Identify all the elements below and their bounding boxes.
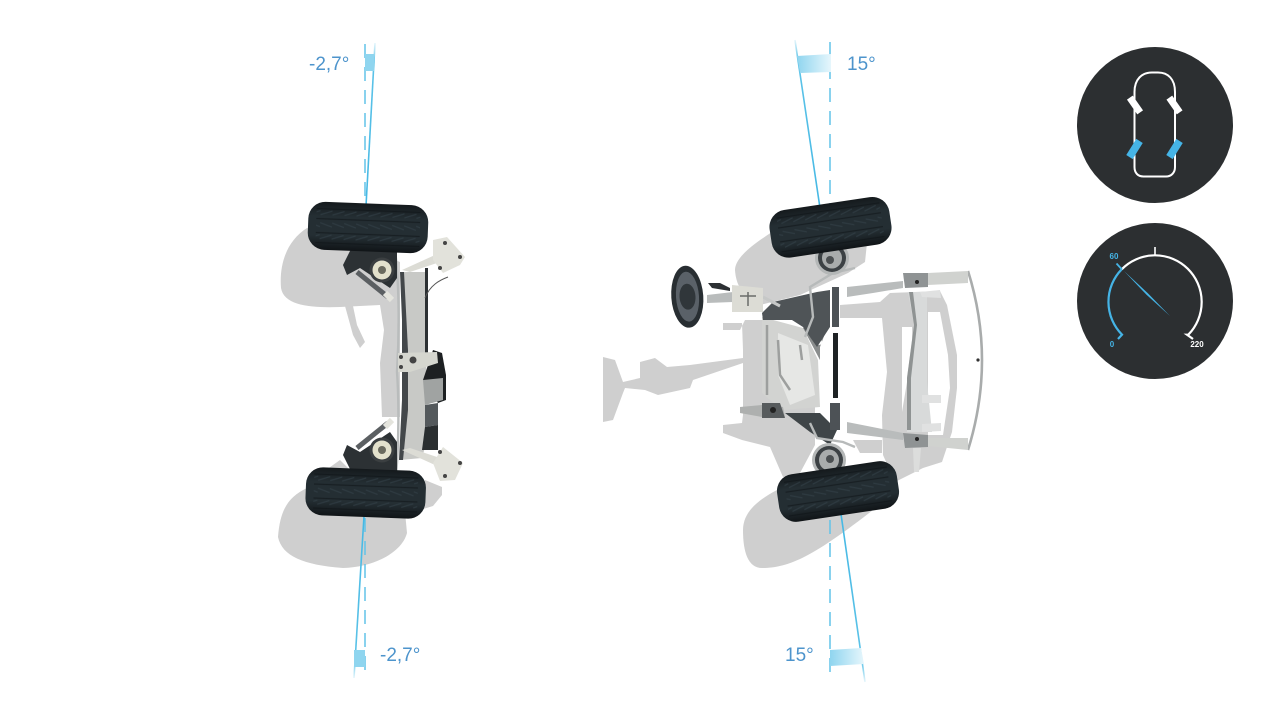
white front right wheel <box>1166 96 1183 114</box>
steering rod <box>425 268 428 353</box>
right assembly shadows <box>603 232 957 568</box>
engine cradle <box>762 317 820 410</box>
steering wheel <box>669 265 705 329</box>
bottom rail pin <box>913 448 921 472</box>
left top angle wedge <box>365 54 374 71</box>
top hub <box>815 241 849 275</box>
steering link to rack <box>763 297 780 306</box>
top control arm <box>343 247 397 288</box>
cradle hole <box>816 339 822 345</box>
top knuckle <box>433 237 465 273</box>
top right tyre <box>767 195 894 260</box>
top tick <box>1154 247 1156 255</box>
bottom side rail <box>847 422 903 440</box>
white front left wheel <box>1127 96 1143 114</box>
crossmember <box>400 272 427 460</box>
car outline <box>1134 72 1175 176</box>
left slanted wheel axes <box>354 43 375 678</box>
cradle rear dark part <box>803 320 830 360</box>
left assembly shadows <box>278 228 442 568</box>
right top angle wedge <box>797 54 831 73</box>
left dashed axis lines <box>364 44 366 678</box>
top left tyre <box>307 201 429 254</box>
left axle: rear chassis <box>305 201 465 519</box>
label: 0: 0 <box>1110 340 1115 349</box>
bottom right tyre <box>775 459 901 524</box>
top rail bracket <box>903 273 928 288</box>
label: top left angle: -2,7° <box>309 54 349 75</box>
bottom link <box>402 448 437 465</box>
top rod end <box>385 293 392 300</box>
needle <box>1124 271 1170 316</box>
label: top right angle: 15° <box>847 54 876 75</box>
top brake tube <box>805 268 855 337</box>
steering column housing <box>732 285 763 312</box>
radiator crossmember <box>907 290 941 432</box>
white speed arc <box>1122 255 1202 339</box>
lower cradle mount <box>740 403 785 418</box>
icon: speedometer <box>1077 223 1233 379</box>
cradle highlight <box>778 333 815 405</box>
left bottom angle wedge <box>354 650 365 667</box>
top link <box>402 255 437 272</box>
label: bottom left angle: -2,7° <box>380 645 420 666</box>
right dashed axis lines <box>829 42 831 672</box>
label: 60: 60 <box>1110 252 1119 261</box>
steering column <box>707 292 733 303</box>
top bellows <box>832 287 839 327</box>
bumper beam <box>968 271 982 450</box>
bottom hub <box>370 438 394 462</box>
60 tick <box>1116 264 1122 270</box>
right slanted wheel axes <box>795 40 865 682</box>
bottom bellows <box>830 403 840 430</box>
lower dark suspension <box>785 413 837 445</box>
actuator cylinder <box>425 403 438 427</box>
crossmember dark band <box>399 272 408 460</box>
right bottom angle wedge <box>830 648 864 666</box>
bottom left tyre <box>305 467 427 519</box>
bottom control arm <box>343 432 397 473</box>
actuator motor <box>423 378 443 405</box>
rear cable <box>425 277 448 298</box>
top side rail <box>847 281 903 297</box>
actuator base <box>422 425 438 450</box>
cradle grooves <box>767 325 802 395</box>
label: 220: 220 <box>1190 340 1204 349</box>
drive rod <box>833 333 838 398</box>
badge background <box>1077 47 1233 203</box>
label: bottom right angle: 15° <box>785 645 814 666</box>
middle bracket <box>398 352 438 372</box>
blue rear right wheel <box>1166 139 1183 159</box>
upper dark suspension <box>762 290 830 347</box>
blue rear left wheel <box>1126 139 1143 159</box>
bottom knuckle <box>433 447 463 481</box>
top hub <box>370 258 394 282</box>
steering column lever <box>708 283 730 291</box>
bottom brake tube <box>810 423 855 447</box>
bottom arm rod <box>357 423 388 448</box>
blue speed arc <box>1108 269 1122 339</box>
right axle: front chassis <box>669 195 982 524</box>
front tube <box>395 250 399 476</box>
bottom hub <box>812 443 846 477</box>
top arm rod <box>357 272 388 297</box>
bumper clip <box>976 358 980 362</box>
bottom rail bracket <box>903 433 928 448</box>
top frame extension <box>928 271 968 285</box>
bottom rod end <box>385 420 392 427</box>
gauge background <box>1077 223 1233 379</box>
icon: car with steered wheels <box>1077 47 1233 203</box>
bottom frame extension <box>928 438 968 450</box>
steering actuator black casing <box>423 350 446 403</box>
